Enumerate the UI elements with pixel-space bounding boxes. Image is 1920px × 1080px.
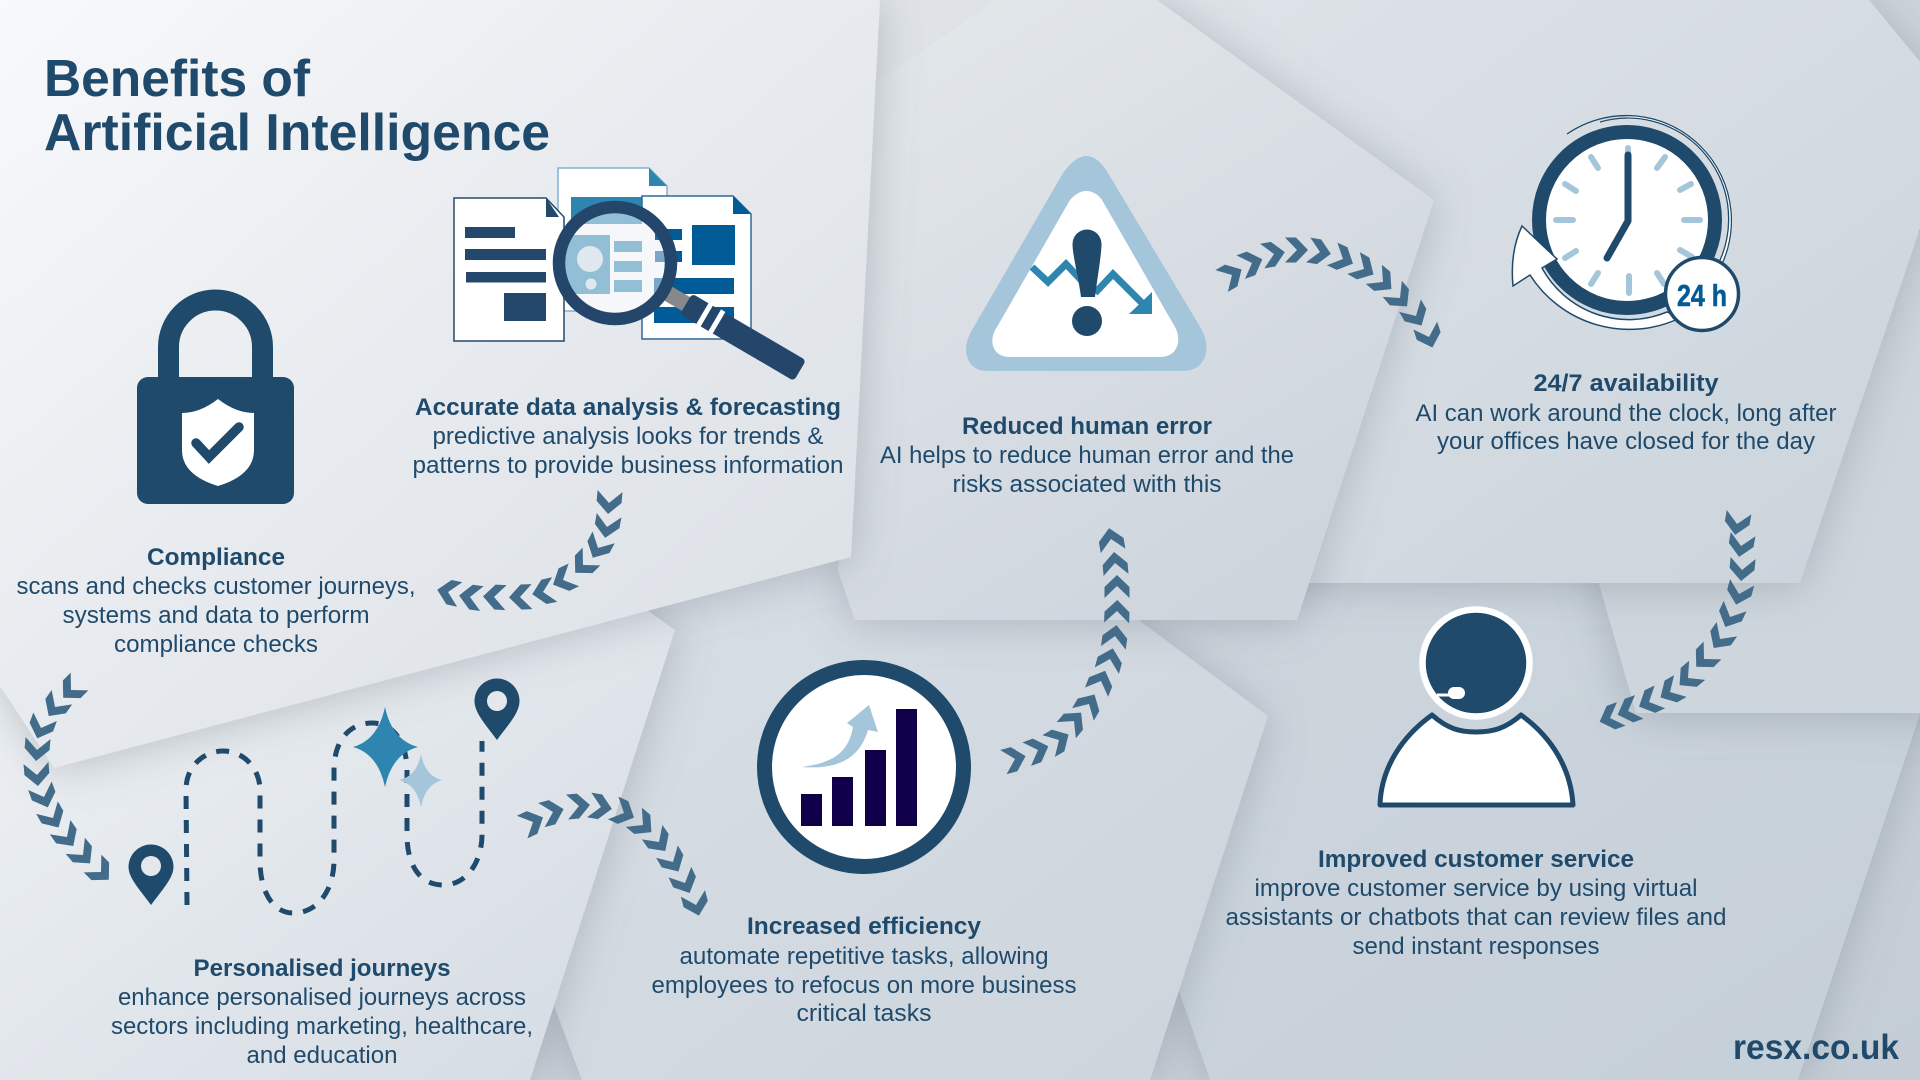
text: compliance: Compliance <box>147 544 285 571</box>
text: increased efficiency: critical tasks <box>796 1000 932 1027</box>
text: personalised journeys: enhance personalised journeys across <box>118 984 526 1011</box>
title: Benefits of <box>44 50 311 108</box>
text: accurate data analysis <box>412 394 844 479</box>
icon: growth chart <box>764 668 964 866</box>
text: 24/7 availability <box>1416 370 1837 455</box>
icon: 24 hour clock <box>1512 116 1738 330</box>
brand url: resx.co.uk <box>1733 1028 1900 1067</box>
text: personalised journeys <box>111 955 533 1069</box>
text: accurate data analysis: patterns to provide business information <box>412 452 844 479</box>
arrow: data analysis to compliance <box>435 490 622 611</box>
icon: documents and magnifier <box>454 168 807 382</box>
arrow: efficiency to reduced error <box>1000 526 1130 774</box>
arrow: compliance to personalised journeys <box>24 673 118 889</box>
text: accurate data analysis: Accurate data analysis & forecasting <box>415 394 841 421</box>
text: compliance: scans and checks customer journeys, <box>16 573 416 600</box>
title <box>44 50 550 162</box>
title: Artificial Intelligence <box>44 104 550 162</box>
text: improved customer service <box>1226 846 1726 960</box>
text: reduced human error <box>880 413 1294 498</box>
icon: padlock with shield <box>137 300 294 504</box>
text: 24/7 availability: AI can work around the clock, long after <box>1416 400 1837 427</box>
text: increased efficiency: employees to refocus on more business <box>652 972 1076 999</box>
text: accurate data analysis: predictive analysis looks for trends & <box>432 423 824 450</box>
text: improved customer service: Improved customer service <box>1318 846 1634 873</box>
text: reduced human error: AI helps to reduce human error and the <box>880 442 1294 469</box>
icon: warning triangle <box>966 156 1206 371</box>
text: increased efficiency <box>652 913 1076 1027</box>
text: 24/7 availability: 24/7 availability <box>1534 370 1719 397</box>
arrow: personalised journeys to efficiency <box>517 793 711 919</box>
icon: 24 hour clock: 24 h <box>1677 278 1727 313</box>
text: increased efficiency: automate repetitive tasks, allowing <box>680 943 1048 970</box>
text: increased efficiency: Increased efficiency <box>747 913 982 940</box>
arrow: reduced error to availability <box>1215 238 1444 351</box>
icon: customer service agent <box>1380 610 1573 805</box>
text: reduced human error: risks associated with this <box>952 471 1222 498</box>
text: reduced human error: Reduced human error <box>962 413 1212 440</box>
text: compliance: compliance checks <box>114 631 318 658</box>
text: improved customer service: improve customer service by using virtual <box>1254 875 1698 902</box>
text: improved customer service: send instant responses <box>1352 933 1600 960</box>
text: compliance <box>16 544 416 658</box>
text: personalised journeys: sectors including marketing, healthcare, <box>111 1013 533 1040</box>
text: improved customer service: assistants or chatbots that can review files and <box>1226 904 1726 931</box>
text: personalised journeys: and education <box>246 1042 398 1069</box>
text: compliance: systems and data to perform <box>62 602 370 629</box>
arrow: availability to customer service <box>1595 510 1755 734</box>
text: personalised journeys: Personalised journeys <box>194 955 450 982</box>
icon: journey route with pins <box>128 678 520 913</box>
text: 24/7 availability: your offices have closed for the day <box>1437 428 1815 455</box>
